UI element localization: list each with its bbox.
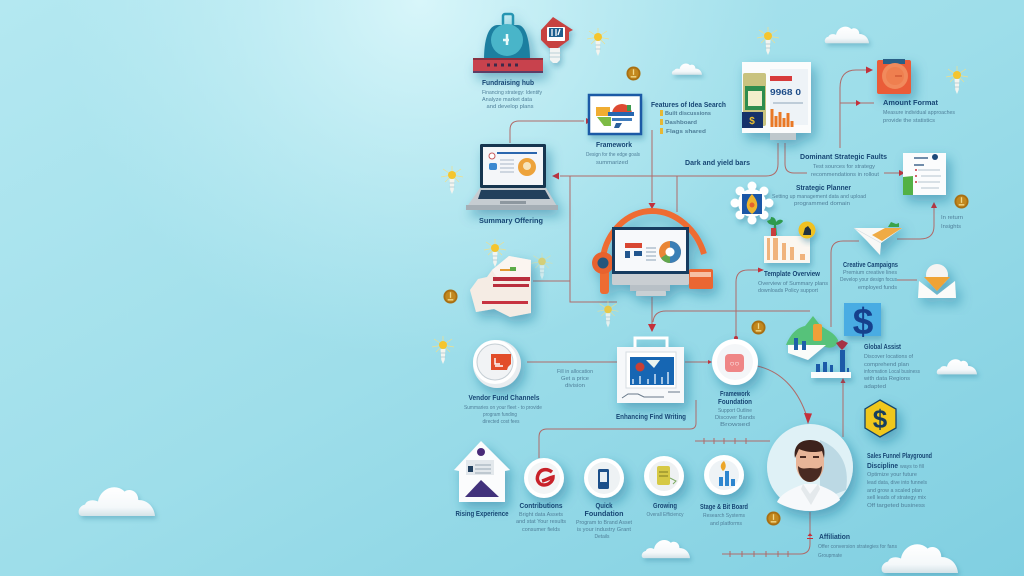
icon: cloud — [825, 27, 869, 43]
text: global assist — [863, 342, 920, 390]
panel: orange clipboard — [877, 59, 911, 94]
text: fundraising hub: Analyze market data — [482, 97, 533, 103]
text: vendor fund channels: Vendor Fund Channels — [468, 393, 540, 402]
text: affiliation — [818, 532, 897, 559]
text: quick foundation — [576, 501, 632, 540]
text: affiliation: Offer conversion strategies for fans — [818, 544, 897, 550]
text: strategic planner: Setting up management data and upload — [772, 194, 866, 200]
text: quick foundation: is your industry Grant — [577, 527, 631, 533]
icon: idea bulb — [598, 301, 618, 327]
icon: hexagon dollar — [865, 400, 896, 437]
text: feature list: Built discussions — [665, 111, 711, 117]
text: vendor fund channels — [464, 393, 542, 425]
text: creative campaigns — [840, 260, 898, 291]
icon: yellow note circle — [644, 456, 684, 496]
text: global assist: with data Regions — [863, 376, 910, 382]
text: strategic planner — [772, 183, 866, 207]
text: frame caption: Design for the edge goals — [586, 152, 640, 158]
icon: bar circle — [704, 455, 744, 495]
text: dominant strategic faults: recommendations in rollout — [811, 172, 879, 178]
text: contributions: consumer fields — [522, 527, 560, 533]
text: summary offering: Summary Offering — [479, 216, 543, 225]
text: growing — [646, 501, 684, 518]
text: sales funnel: sell leads of strategy mix — [867, 495, 926, 501]
text: framework foundation: Foundation — [718, 397, 752, 406]
text: sales funnel — [867, 451, 932, 509]
text: global assist: Global Assist — [864, 342, 901, 351]
text: contributions — [516, 501, 566, 533]
text: template overview: Template Overview — [764, 269, 820, 278]
icon: idea bulb — [757, 27, 779, 55]
icon: green landscape — [786, 316, 838, 360]
text: amount format — [883, 98, 955, 124]
text: global assist: comprehend plan — [864, 362, 909, 368]
text: amount format: provide the statistics — [883, 118, 935, 124]
text: strategic planner: programmed domain — [794, 201, 850, 207]
panel: framed chart — [589, 95, 641, 134]
panel: dashboard monitor: 9968 0 — [770, 87, 801, 97]
icon: cloud — [642, 540, 690, 558]
text: sales funnel: Sales Funnel Playground — [867, 451, 932, 460]
panel: portrait — [767, 424, 853, 511]
text: stage bit board: Stage & Bit Board — [700, 502, 748, 511]
text: feature list: Dashboard — [665, 120, 698, 126]
icon: paper plane — [854, 222, 902, 255]
text: creative campaigns: Develop your design focus — [840, 277, 897, 283]
icon: bar chart with plant — [764, 217, 810, 263]
text: strategic planner: Strategic Planner — [796, 183, 851, 192]
text: contributions: Contributions — [520, 501, 562, 510]
text: vendor side note: Get a price — [561, 376, 589, 382]
text: template overview — [758, 269, 828, 294]
text: affiliation: Affiliation — [819, 532, 850, 541]
text: sales funnel: Optimize your future — [867, 472, 917, 478]
text: sales funnel: ways to fill — [899, 464, 924, 470]
text: rising experience: Rising Experience — [456, 509, 508, 518]
icon: house document — [454, 441, 510, 502]
icon: idea bulb — [587, 28, 609, 56]
icon: framework circle: ○○ — [730, 359, 739, 368]
panel: dashboard monitor — [742, 62, 811, 140]
icon: vendor circle — [473, 340, 521, 388]
text: framework foundation: Support Outline — [718, 408, 752, 414]
text: sales funnel: Discipline — [867, 461, 898, 470]
icon: framework circle — [712, 339, 758, 385]
text: stage bit board — [700, 502, 748, 527]
text: amount format: Amount Format — [883, 98, 938, 107]
text: global assist: Discover locations of — [864, 354, 913, 360]
text: template overview: downloads Policy support — [758, 288, 818, 294]
text: quick foundation: Program to Brand Asset — [576, 520, 632, 526]
text: small note — [941, 215, 963, 230]
text: quick foundation: Details — [594, 534, 610, 540]
text: framework foundation: Framework — [720, 389, 751, 398]
icon: pale bulb — [532, 253, 552, 279]
icon: coin — [443, 289, 458, 304]
text: vendor fund channels: Summaries on your fleet - to provide — [464, 405, 542, 411]
icon: contributions circle — [524, 458, 564, 498]
text: creative campaigns: employed funds — [858, 285, 897, 291]
text: sales funnel: Off targeted business — [867, 503, 925, 509]
icon: idea bulb — [484, 239, 506, 267]
icon: idea bulb — [946, 66, 968, 94]
text: global assist: adapted — [864, 384, 886, 390]
text: growing: Overall Efficiency — [646, 512, 684, 518]
text: fundraising hub: Fundraising hub — [482, 78, 534, 87]
text: dark and yield: Dark and yield bars — [685, 158, 750, 167]
icon: coin — [954, 194, 969, 209]
text: frame caption — [586, 140, 640, 166]
text: amount format: Measure individual approaches — [883, 110, 955, 116]
text: enhancing find writing: Enhancing Find Writing — [616, 412, 686, 421]
icon: cloud — [672, 63, 702, 75]
text: contributions: and stat Your results — [516, 519, 566, 525]
icon: house bulb — [541, 17, 573, 63]
text: feature list: Features of Idea Search — [651, 100, 726, 109]
text: sales funnel: lead data, dive into funnels — [867, 480, 927, 486]
text: creative campaigns: Premium creative lines — [843, 270, 897, 276]
icon: idea bulb — [441, 166, 463, 194]
text: creative campaigns: Creative Campaigns — [843, 260, 898, 269]
icon: hexagon dollar: $ — [873, 404, 888, 434]
icon: bars and flag — [811, 340, 851, 378]
text: template overview: Overview of Summary plans — [758, 281, 828, 287]
text: global assist: information Local business — [864, 369, 920, 375]
icon: headset monitor — [592, 211, 713, 296]
icon: laptop — [466, 144, 558, 210]
text: vendor side note: Fill in allocation — [557, 369, 593, 375]
text: framework foundation — [715, 389, 755, 428]
icon: idea bulb — [432, 336, 454, 364]
icon: coin — [766, 511, 781, 526]
text: contributions: Bright data Assets — [519, 512, 563, 518]
icon: cloud — [937, 359, 977, 374]
text: small note: Insights — [941, 224, 961, 230]
panel: dashboard monitor: $ — [749, 116, 755, 127]
icon: dollar square — [844, 301, 881, 342]
panel: document — [903, 153, 946, 195]
text: affiliation: Groupmate — [818, 553, 842, 559]
text: framework foundation: Browsed — [720, 422, 750, 428]
text: feature list — [651, 100, 726, 135]
text: sales funnel: and grow a scaled plan — [867, 488, 922, 494]
text: quick foundation: Foundation — [584, 509, 624, 518]
icon: phone circle — [584, 458, 624, 498]
text: frame caption: Framework — [596, 140, 633, 149]
text: frame caption: summarized — [596, 160, 628, 166]
icon: backpack safe — [473, 14, 543, 73]
text: fundraising hub: Financing strategy: Identify — [482, 90, 542, 96]
text: framework foundation: Discover Bands — [715, 415, 755, 421]
text: vendor fund channels: directed cost fees — [482, 419, 520, 425]
text: feature list: Flags shared — [666, 129, 707, 135]
text: small note: In return — [941, 215, 963, 221]
text: dominant strategic faults: Test sources for strategy — [813, 164, 875, 170]
text: growing: Growing — [653, 501, 677, 510]
icon: crumpled paper — [470, 256, 531, 317]
icon: cloud — [882, 544, 958, 573]
text: fundraising hub: and develop plans — [486, 104, 534, 110]
connector lines — [510, 66, 937, 557]
icon: briefcase screen — [617, 338, 684, 403]
icon: large cloud — [79, 487, 155, 516]
text: vendor side note — [557, 369, 593, 389]
icon: dollar square: $ — [853, 301, 874, 342]
icon: coin — [626, 66, 641, 81]
icon: coin badge — [798, 222, 816, 238]
icon: coin — [751, 320, 766, 335]
text: vendor side note: division — [565, 383, 585, 389]
text: quick foundation: Quick — [596, 501, 613, 510]
icon: gear — [730, 182, 774, 224]
text: stage bit board: and platforms — [710, 521, 742, 527]
text: dominant strategic faults — [800, 152, 887, 178]
text: stage bit board: Research Systems — [703, 513, 745, 519]
text: fundraising hub — [482, 78, 542, 110]
text: vendor fund channels: program funding — [483, 412, 517, 418]
icon: egg envelope — [918, 264, 956, 298]
text: dominant strategic faults: Dominant Strategic Faults — [800, 152, 887, 161]
